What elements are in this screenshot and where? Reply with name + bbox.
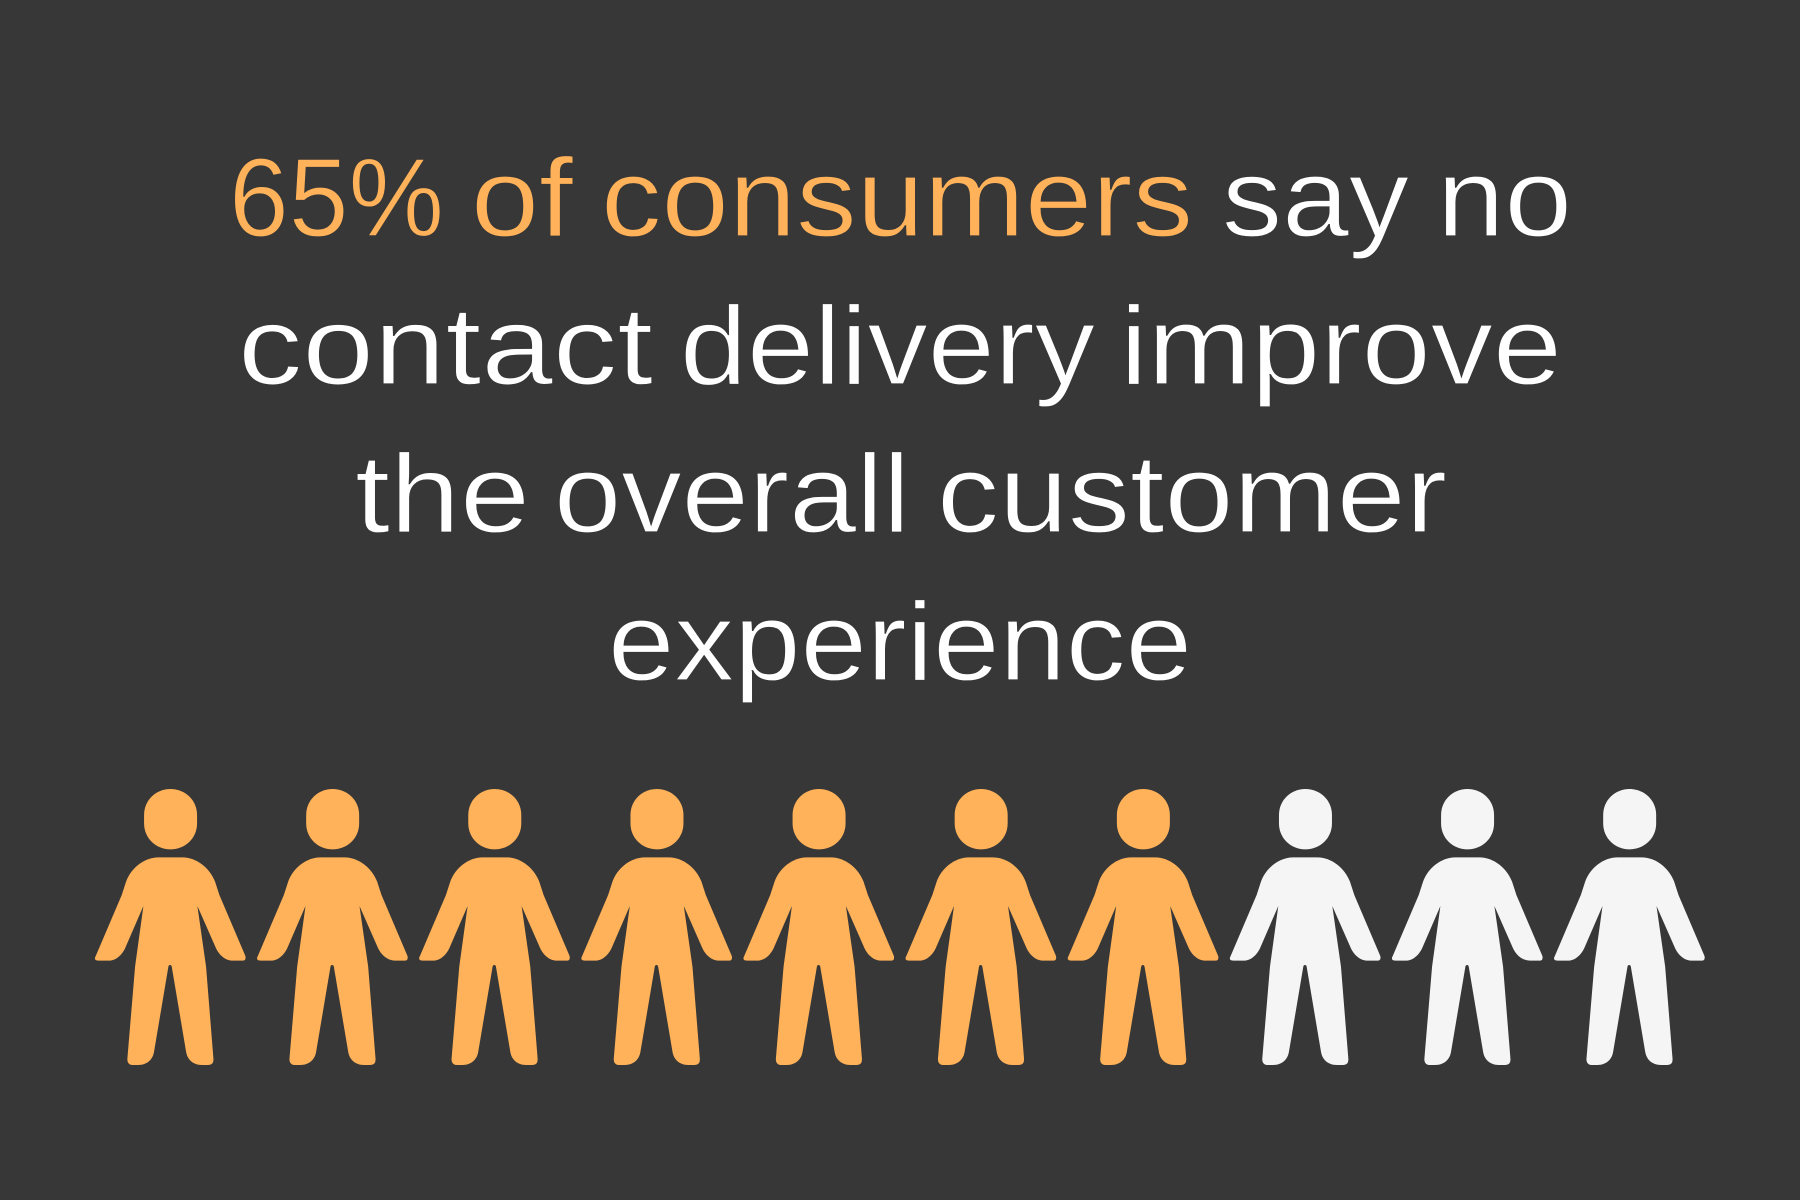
headline line 1: no <box>1437 136 1572 260</box>
headline <box>229 136 1572 704</box>
headline line 1: consumers <box>601 136 1193 260</box>
headline line 1: 65% <box>229 136 444 260</box>
pictogram row: 7 of 10 people highlighted <box>95 789 1705 1065</box>
person 10 neutral <box>1554 789 1705 1065</box>
person 9 neutral <box>1392 789 1543 1065</box>
headline line 1: say <box>1222 136 1410 260</box>
headline line 2: delivery <box>680 284 1096 408</box>
person 4 highlighted <box>581 789 732 1065</box>
person 1 highlighted <box>95 789 246 1065</box>
person 6 highlighted <box>906 789 1056 1065</box>
person 3 highlighted <box>419 789 570 1065</box>
headline line 3: the <box>355 432 530 556</box>
headline line 4: experience <box>608 580 1192 704</box>
headline line 2: improve <box>1120 284 1562 408</box>
person 5 highlighted <box>743 789 894 1065</box>
headline line 1: of <box>471 136 573 260</box>
headline line 2: contact <box>238 284 653 408</box>
headline line 3: customer <box>937 432 1447 556</box>
headline line 3: overall <box>554 432 910 556</box>
person 8 neutral <box>1230 789 1381 1065</box>
person 7 highlighted <box>1068 789 1218 1065</box>
person 2 highlighted <box>257 789 408 1065</box>
